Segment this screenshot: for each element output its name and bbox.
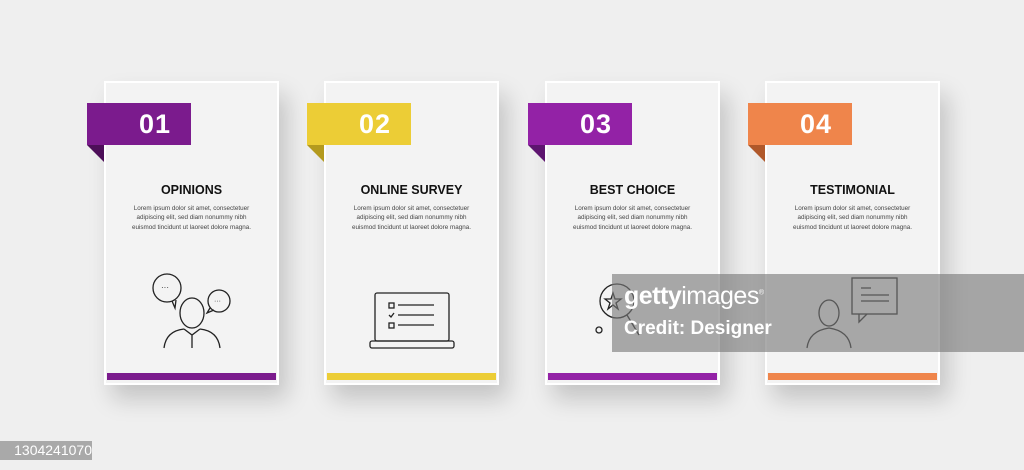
text: best choice: Lorem ipsum dolor sit amet, consectetuer xyxy=(575,205,690,212)
watermark overlay xyxy=(612,274,1024,352)
icon: person with message xyxy=(806,277,898,348)
text: online survey: adipiscing elit, sed diam nonummy nibh xyxy=(357,214,466,221)
tab 02 xyxy=(307,103,411,145)
tab 02: 02 xyxy=(359,109,391,139)
text: online survey: Lorem ipsum dolor sit amet, consectetuer xyxy=(354,205,469,212)
text: online survey xyxy=(352,205,471,231)
card 4: testimonial xyxy=(765,81,940,385)
card 2: online survey xyxy=(324,81,499,385)
heading: best choice: BEST CHOICE xyxy=(590,183,675,197)
tab 01: 01 xyxy=(139,109,171,139)
text: testimonial: Lorem ipsum dolor sit amet, consectetuer xyxy=(795,205,910,212)
heading: opinions: OPINIONS xyxy=(161,183,222,197)
tab 04 xyxy=(748,103,852,145)
text: opinions: adipiscing elit, sed diam nonummy nibh xyxy=(137,214,246,221)
icon: magnifier with star xyxy=(595,283,640,336)
text: best choice: euismod tincidunt ut laoreet dolore magna. xyxy=(573,224,692,231)
text: online survey: euismod tincidunt ut laoreet dolore magna. xyxy=(352,224,471,231)
tab 03: 03 xyxy=(580,109,612,139)
text: best choice: adipiscing elit, sed diam nonummy nibh xyxy=(578,214,687,221)
text: testimonial xyxy=(793,205,912,231)
text: opinions: euismod tincidunt ut laoreet dolore magna. xyxy=(132,224,251,231)
text: testimonial: euismod tincidunt ut laoreet dolore magna. xyxy=(793,224,912,231)
bottom bar 1 xyxy=(107,373,276,380)
text: best choice xyxy=(573,205,692,231)
icon: person with speech bubbles: ··· xyxy=(161,283,169,292)
icon: person with speech bubbles xyxy=(152,273,231,348)
card 3: best choice xyxy=(545,81,720,385)
heading: online survey: ONLINE SURVEY xyxy=(361,183,462,197)
watermark overlay: gettyimages® xyxy=(624,282,764,310)
text: opinions: Lorem ipsum dolor sit amet, consectetuer xyxy=(134,205,249,212)
text: testimonial: adipiscing elit, sed diam nonummy nibh xyxy=(798,214,907,221)
icon: laptop checklist xyxy=(369,292,455,349)
tab 03 xyxy=(528,103,632,145)
image id badge: 1304241070 xyxy=(14,442,92,458)
icon: person with speech bubbles: ··· xyxy=(214,298,221,305)
tab 04: 04 xyxy=(800,109,832,139)
card 1: opinions xyxy=(104,81,279,385)
watermark overlay: Credit: Designer xyxy=(624,318,772,339)
text: opinions xyxy=(132,205,251,231)
bottom bar 3 xyxy=(548,373,717,380)
tab 01 xyxy=(87,103,191,145)
heading: testimonial: TESTIMONIAL xyxy=(810,183,895,197)
bottom bar 2 xyxy=(327,373,496,380)
bottom bar 4 xyxy=(768,373,937,380)
